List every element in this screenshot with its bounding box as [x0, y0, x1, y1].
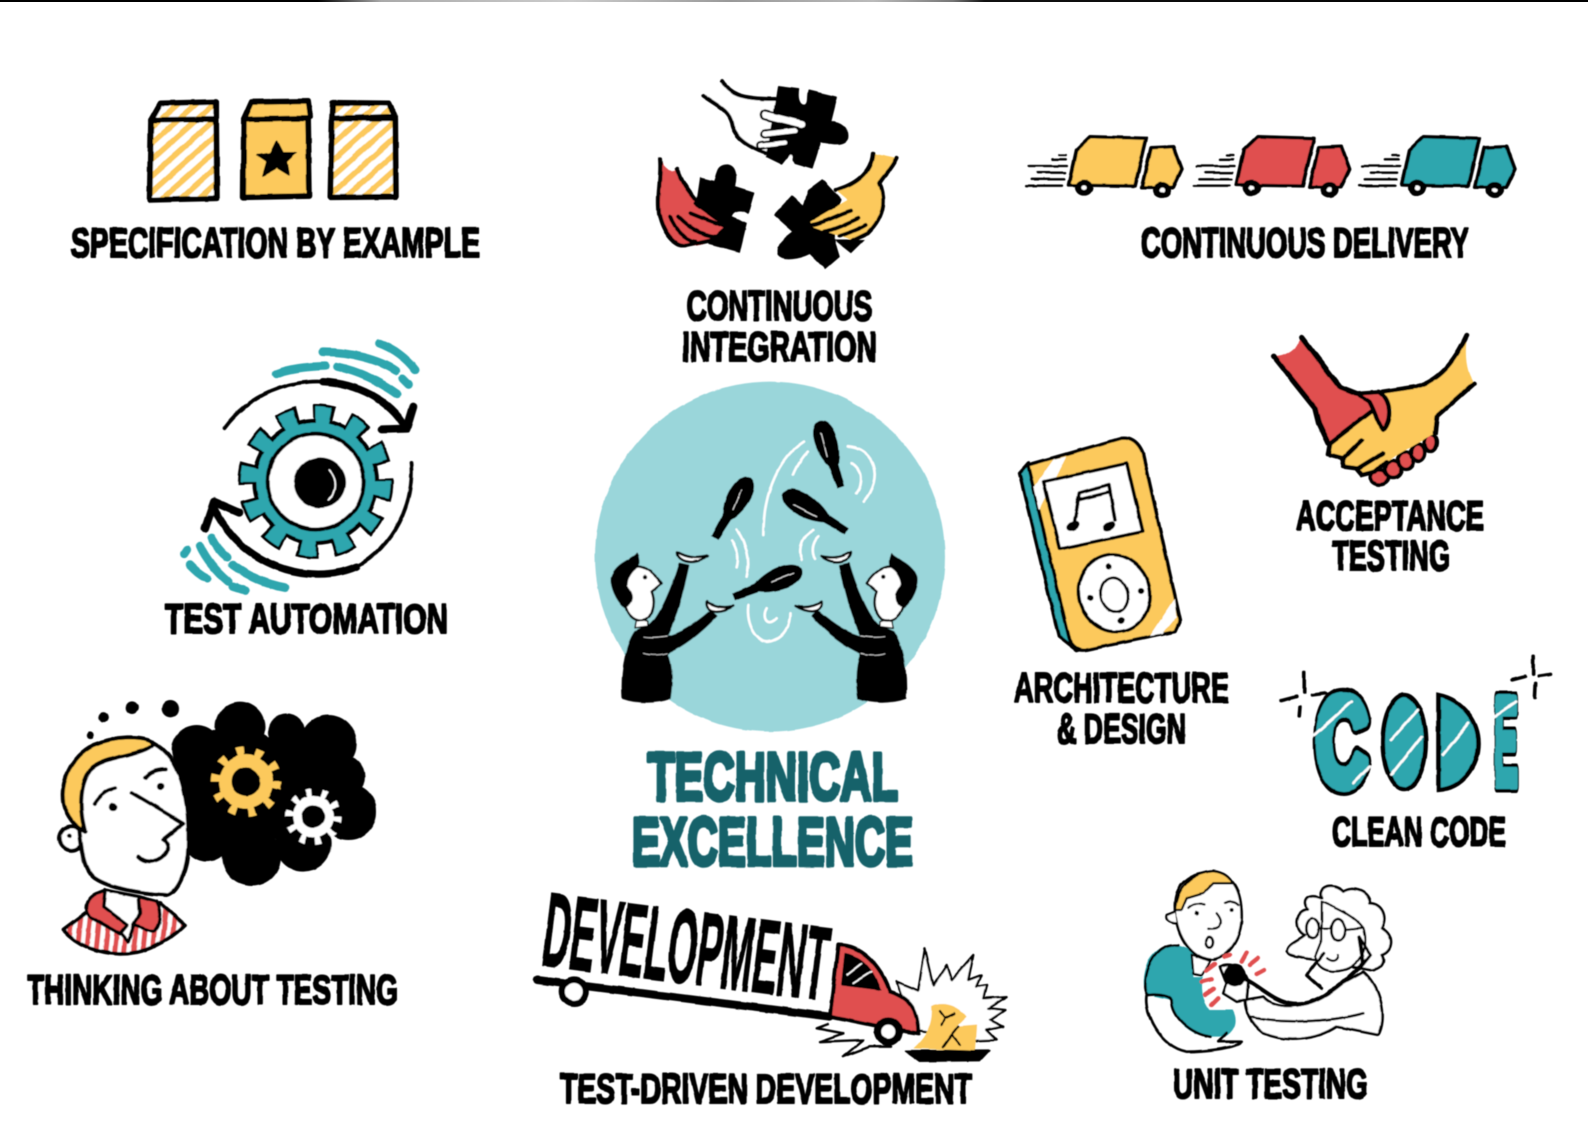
panel: continuous delivery — [1026, 137, 1515, 266]
label: CONTINUOUS — [687, 282, 872, 329]
left juggler — [611, 552, 733, 702]
panel: architecture and design — [1014, 438, 1229, 752]
icon: CODE lettering — [1281, 656, 1551, 812]
icon: hands with puzzle pieces — [658, 82, 897, 268]
red thumb — [1356, 392, 1389, 430]
right juggler — [795, 552, 917, 702]
cab — [830, 945, 918, 1033]
stethoscope — [1233, 937, 1363, 1004]
icon: thinking man with gears — [60, 700, 377, 954]
label: THINKING ABOUT TESTING — [27, 966, 398, 1013]
doctor face — [1315, 902, 1365, 971]
head — [79, 743, 188, 895]
teal truck — [1359, 137, 1515, 197]
club highlights — [733, 433, 827, 582]
white juggling swooshes — [732, 442, 875, 642]
red truck — [1194, 137, 1350, 197]
flatbed — [537, 980, 830, 1017]
circle and jugglers — [595, 382, 945, 732]
icon: three boxes — [150, 101, 396, 200]
rock and shadow — [905, 1050, 990, 1061]
panel: test-driven development — [537, 872, 1007, 1112]
label: TEST AUTOMATION — [165, 595, 448, 642]
pupil — [294, 457, 346, 508]
yellow gear — [216, 752, 276, 812]
title line 2: EXCELLENCE — [632, 804, 913, 880]
teal motion streaks — [185, 343, 415, 591]
hair — [63, 738, 154, 832]
icon: crashing truck — [537, 872, 1007, 1061]
doctor hand — [1220, 965, 1248, 1002]
label: TEST-DRIVEN DEVELOPMENT — [560, 1065, 972, 1112]
shine lines — [1314, 702, 1516, 783]
skid lines — [817, 1024, 892, 1057]
icon: gear with arrows — [185, 343, 415, 591]
doctor hair — [1287, 886, 1391, 970]
ear — [60, 826, 84, 850]
patient shirt — [1143, 945, 1236, 1037]
icon: CODE lettering: C — [1316, 673, 1368, 812]
icon: CODE lettering: C — [1316, 673, 1368, 812]
panel: test automation — [165, 343, 448, 642]
icon: crashing truck: DEVELOPMENT — [537, 872, 835, 1023]
panel: unit testing — [1143, 871, 1391, 1107]
thought cloud — [170, 702, 377, 886]
patient head — [1175, 872, 1242, 960]
icon: handshake — [1274, 335, 1474, 485]
panel: technical excellence — [595, 382, 945, 880]
label: ARCHITECTURE — [1014, 664, 1229, 711]
label: ACCEPTANCE — [1296, 492, 1484, 539]
doctor body — [1245, 972, 1383, 1039]
panel: specification by example — [71, 101, 480, 266]
panel: continuous integration — [658, 82, 897, 370]
label line 2: & DESIGN — [1057, 705, 1186, 752]
panel: acceptance testing — [1274, 335, 1484, 579]
icon: music player — [1020, 438, 1180, 651]
icon: CODE lettering: E — [1494, 673, 1518, 812]
juggling clubs — [706, 418, 852, 607]
explosion — [897, 948, 1007, 1041]
icon: doctor and patient — [1143, 871, 1391, 1052]
yellow truck — [1026, 137, 1182, 197]
panel: clean code — [1281, 656, 1551, 855]
panel: thinking about testing — [27, 700, 398, 1013]
sparkles — [1281, 656, 1551, 716]
label: UNIT TESTING — [1173, 1060, 1368, 1107]
label: SPECIFICATION BY EXAMPLE — [71, 219, 480, 266]
white gear — [290, 793, 337, 840]
red heartbeat marks — [1202, 953, 1264, 1005]
thought dots — [86, 700, 179, 739]
icon: CODE lettering: E — [1494, 673, 1518, 812]
shirt — [63, 903, 185, 954]
label line 2: TESTING — [1332, 532, 1450, 579]
title: TECHNICAL — [648, 739, 898, 815]
background circle — [595, 382, 945, 732]
label line 2: INTEGRATION — [682, 323, 877, 370]
gear teeth — [248, 414, 384, 550]
icon: three trucks — [1026, 137, 1515, 197]
arrows — [224, 382, 323, 428]
face — [94, 769, 183, 861]
